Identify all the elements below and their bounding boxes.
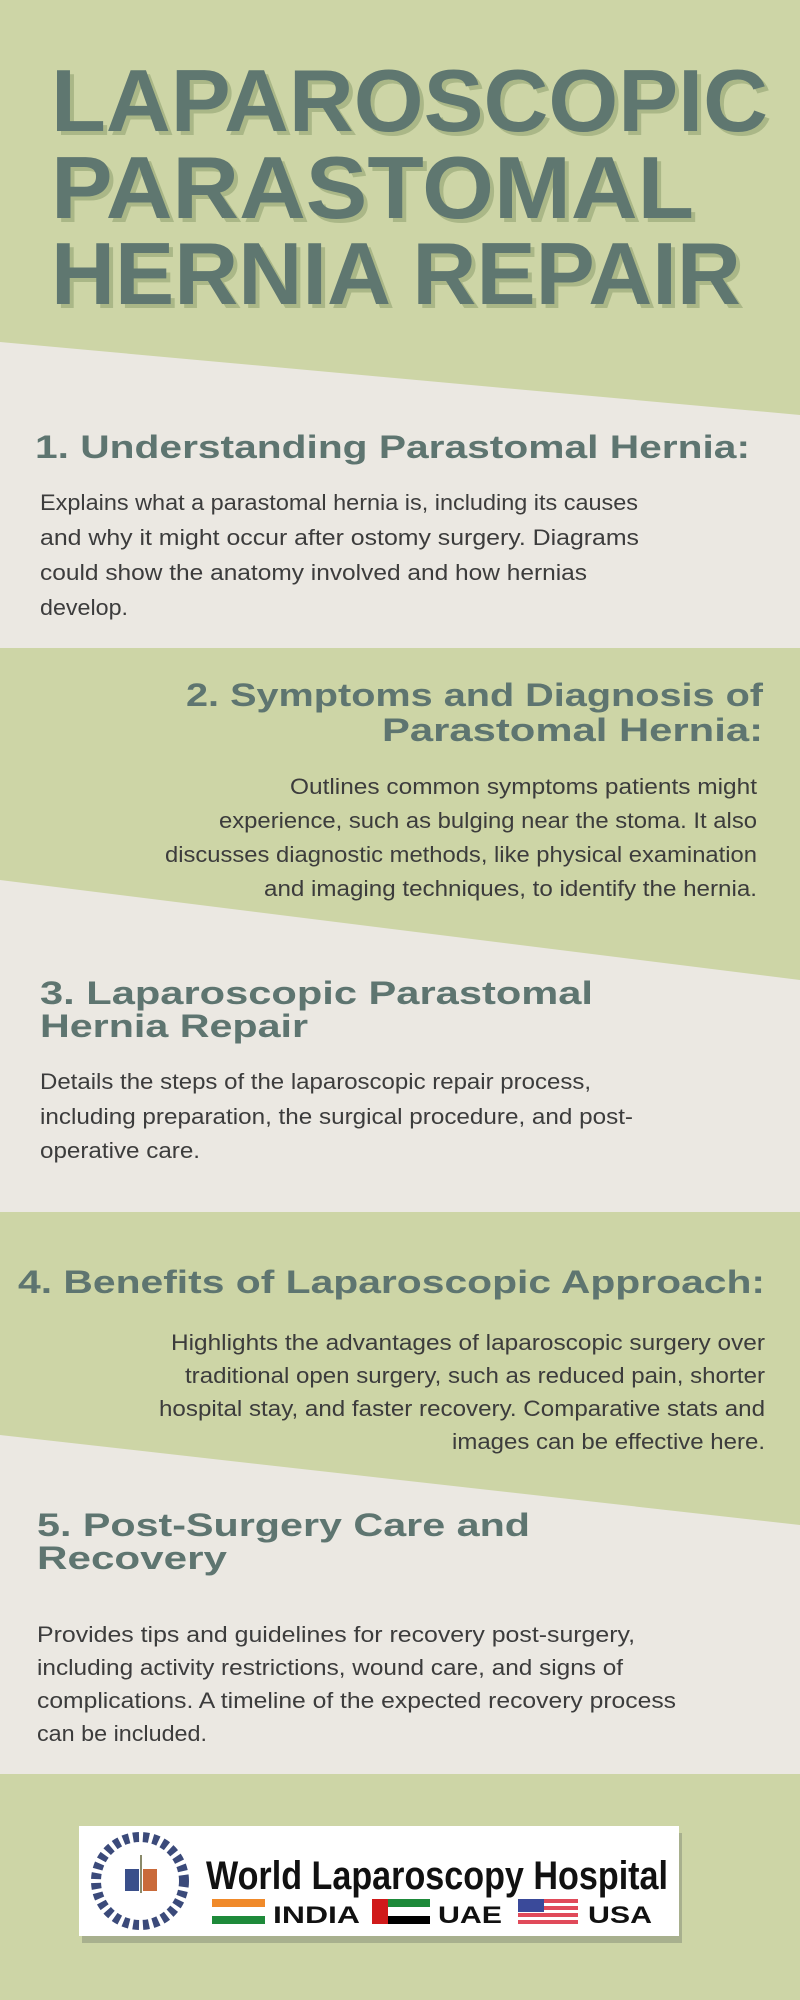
heading: section 3: 3. Laparoscopic Parastomal (40, 975, 593, 1011)
text: section 5: including activity restrictions, wound care, and signs of (37, 1655, 624, 1680)
flags row: USA (588, 1902, 652, 1929)
heading: section 5: Recovery (37, 1540, 227, 1576)
title: HERNIA REPAIR (55, 228, 745, 327)
text: section 4: hospital stay, and faster recovery. Comparative stats and (159, 1396, 765, 1421)
text: section 5 (37, 1622, 676, 1746)
text: section 3 (40, 1069, 633, 1163)
text: section 1 (40, 490, 639, 620)
flags row: UAE (438, 1902, 502, 1929)
heading: section 2: Parastomal Hernia: (382, 712, 763, 748)
title: PARASTOMAL (55, 142, 698, 241)
text: section 4: traditional open surgery, such as reduced pain, shorter (185, 1363, 765, 1388)
heading: section 1: 1. Understanding Parastomal Hernia: (35, 429, 750, 465)
heading: section 3: Hernia Repair (40, 1008, 308, 1044)
heading: section 5 (37, 1507, 530, 1576)
text: section 2: Outlines common symptoms patients might (290, 774, 757, 799)
text: section 4: Highlights the advantages of laparoscopic surgery over (171, 1330, 765, 1355)
text: section 2: and imaging techniques, to identify the hernia. (264, 876, 757, 901)
logo banner (79, 1826, 682, 1943)
text: section 1: Explains what a parastomal hernia is, including its causes (40, 490, 638, 515)
text: section 5: complications. A timeline of the expected recovery process (37, 1688, 676, 1713)
text: section 3: Details the steps of the laparoscopic repair process, (40, 1069, 591, 1094)
heading: section 2 (186, 677, 763, 748)
text: section 1: could show the anatomy involved and how hernias (40, 560, 587, 585)
heading: section 2: 2. Symptoms and Diagnosis of (186, 677, 763, 713)
text: section 4: images can be effective here. (452, 1429, 765, 1454)
title: PARASTOMAL (51, 138, 694, 237)
text: section 1: develop. (40, 595, 128, 620)
title (51, 51, 772, 327)
title: LAPAROSCOPIC (55, 55, 772, 154)
heading: section 4: 4. Benefits of Laparoscopic Approach: (18, 1264, 765, 1300)
flags row (212, 1899, 652, 1929)
icon: wreath emblem (96, 1837, 184, 1925)
heading: section 3 (40, 975, 593, 1044)
flags row: INDIA (273, 1902, 360, 1929)
text: section 2: discusses diagnostic methods, like physical examination (165, 842, 757, 867)
text: section 3: operative care. (40, 1138, 200, 1163)
text: section 4 (159, 1330, 765, 1454)
text: section 2: experience, such as bulging near the stoma. It also (219, 808, 757, 833)
hospital name: World Laparoscopy Hospital (206, 1854, 668, 1898)
text: section 1: and why it might occur after ostomy surgery. Diagrams (40, 525, 639, 550)
text: section 5: Provides tips and guidelines for recovery post-surgery, (37, 1622, 635, 1647)
text: section 3: including preparation, the surgical procedure, and post- (40, 1104, 633, 1129)
text: section 5: can be included. (37, 1721, 207, 1746)
title: HERNIA REPAIR (51, 224, 741, 323)
heading: section 5: 5. Post-Surgery Care and (37, 1507, 530, 1543)
title: LAPAROSCOPIC (51, 51, 768, 150)
text: section 2 (165, 774, 757, 901)
